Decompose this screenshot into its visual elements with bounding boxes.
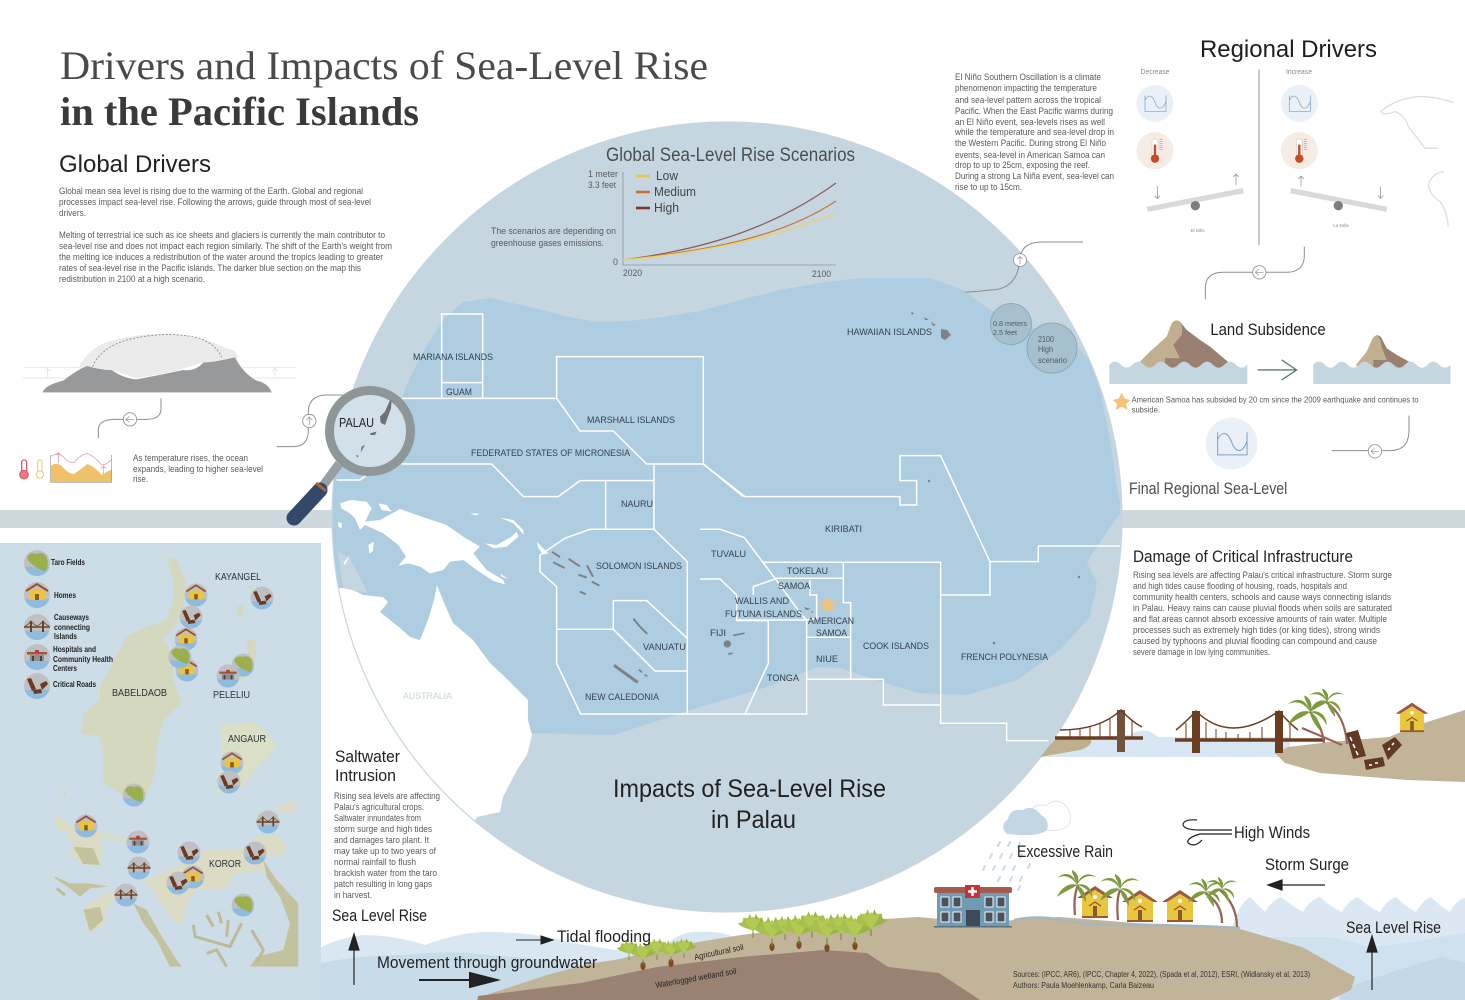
text block: global drivers: redistribution in 2100 at a high scenario.: [59, 274, 205, 284]
title: in the Pacific Islands: [60, 89, 419, 134]
title: [60, 43, 708, 134]
arrow: tidal flooding: [516, 936, 553, 944]
callout: 2100 High scenario bubble: scenario: [1038, 356, 1068, 365]
icon: star American Samoa on map: [819, 596, 837, 613]
heading: Saltwater Intrusion: Intrusion: [335, 766, 396, 785]
arrow: sea level rise left: [349, 934, 359, 985]
arrow: from scenarios chart to regional drivers: [965, 242, 1083, 292]
panel: ice sheet melting: [23, 334, 296, 392]
label: Movement through groundwater: Movement through groundwater: [377, 953, 597, 972]
seesaw: El Niño: [1147, 174, 1243, 233]
text block: ENSO: and sea-level pattern across the tropical: [955, 95, 1101, 105]
text block: ENSO: Pacific. When the East Pacific warms during: [955, 106, 1113, 116]
text: ocean expansion: [133, 453, 263, 484]
label: Federated States of Micronesia: FEDERATED STATES OF MICRONESIA: [471, 447, 631, 458]
darker blue redistribution area: [300, 278, 1120, 735]
palm crowns: [1288, 688, 1344, 731]
grey runoff line: [1014, 918, 1240, 928]
brown soil: [478, 950, 980, 1000]
legend: [636, 169, 696, 215]
label: Tokelau: TOKELAU: [787, 565, 828, 576]
circle outline: [332, 122, 1122, 912]
text block: global drivers: the melting ice induces a redistribution of the water around the tropics leading to greater: [59, 252, 383, 262]
heading: Regional Drivers: Regional Drivers: [1200, 36, 1377, 63]
icon: temperature decrease: [1136, 132, 1173, 169]
legend labels: [51, 558, 113, 689]
legend labels: Islands: [54, 632, 77, 641]
callout: 0.8 meters bubble: 0.8 meters: [993, 319, 1027, 328]
heading: Saltwater Intrusion: Saltwater: [335, 747, 400, 766]
arrow: ice to thermal expansion: [98, 398, 161, 438]
label: High Winds: High Winds: [1234, 823, 1310, 842]
label: Tuvalu: TUVALU: [711, 548, 746, 559]
callout: 2100 High scenario bubble: High: [1038, 345, 1053, 354]
icon: sea level increase: [1281, 85, 1318, 122]
text block: ENSO: El Niño Southern Oscillation is a climate: [955, 72, 1101, 82]
palms trunks: [1074, 885, 1237, 927]
ice cap: [78, 334, 237, 378]
legend: [24, 550, 113, 700]
line: high: [623, 183, 836, 260]
text block: global drivers: rates of sea-level rise in the Pacific islands. The darker blue section on the map this: [59, 263, 362, 273]
label: Kiribati: KIRIBATI: [825, 523, 862, 534]
text block: global drivers: Melting of terrestrial ice such as ice sheets and glaciers is currently the main contributor to: [59, 230, 385, 240]
legend: Low: [656, 169, 679, 183]
islands in dark grey: [553, 552, 744, 682]
label: Sea Level Rise right: Sea Level Rise: [1346, 918, 1441, 937]
axis labels: 1 meter: [588, 169, 618, 179]
divider: [1257, 69, 1261, 245]
panel: central Pacific map circle: [300, 122, 1122, 912]
icon: rain cloud: [983, 801, 1071, 890]
legend labels: Homes: [54, 591, 76, 600]
water left mid: [321, 952, 620, 1000]
heading: Impacts of Sea-Level Rise in Palau: [613, 775, 886, 834]
panel: ENSO diagram: [1109, 69, 1454, 498]
water: [1040, 730, 1290, 757]
label: American: AMERICAN: [808, 615, 854, 626]
line: medium: [623, 201, 836, 260]
legend: hospitals: [24, 644, 50, 671]
horizontal band: [0, 510, 1465, 528]
text block: saltwater: normal rainfall to flush: [334, 857, 416, 867]
label: waterlogged wetland soil: Waterlogged wetland soil: [655, 966, 737, 990]
legend labels: Taro Fields: [51, 558, 85, 567]
text: ocean expansion: As temperature rises, the ocean: [133, 453, 248, 463]
label: Nauru: NAURU: [621, 498, 653, 509]
text block: ENSO: During a strong La Niña event, sea-level can: [955, 171, 1114, 181]
label: French Polynesia: FRENCH POLYNESIA: [961, 651, 1049, 662]
sources: Sources: (IPCC, AR6), (IPCC, Chapter 4, 2022), (Spada et al, 2012), ESRI, (Widlansky et al, 2013): [1013, 970, 1310, 979]
dashed flow: [93, 335, 222, 367]
icon: thermal expansion chart: [20, 453, 112, 482]
panel background: [0, 543, 321, 1000]
label: Solomon Islands: SOLOMON ISLANDS: [596, 560, 682, 571]
arrow: sea level rise right: [1367, 936, 1377, 990]
EEZ boundary lines east: [700, 456, 1120, 741]
text block: damage: severe damage in low lying communities.: [1133, 647, 1270, 657]
land: Australia: [339, 585, 532, 820]
Hawaii and east Pacific islands: [804, 312, 1080, 644]
heading: Saltwater Intrusion: [335, 747, 400, 785]
water right mid: [1268, 933, 1465, 1000]
chart axes: [623, 172, 836, 265]
label: Futuna Islands: FUTUNA ISLANDS: [725, 608, 802, 619]
legend: critical roads: [24, 673, 50, 700]
callout: 0.8 meters bubble: [990, 304, 1032, 344]
heading: Land Subsidence: Land Subsidence: [1210, 320, 1326, 339]
legend: High: [654, 201, 679, 215]
text block: saltwater: may take up to two years of: [334, 846, 437, 856]
text block: ENSO: rise to up to 15cm.: [955, 182, 1022, 192]
legend labels: Centers: [53, 664, 77, 673]
land: New Guinea and islands: [338, 500, 548, 584]
arrow: storm surge: [1268, 880, 1325, 890]
small sea level arrows: [45, 368, 278, 377]
island labels: [112, 572, 266, 870]
EEZ boundary lines west: [337, 314, 750, 714]
text block: damage: in Palau. Heavy rains can cause pluvial floods when soils are saturated: [1133, 603, 1392, 613]
text block: damage: processes such as extremely high tides (or king tides), strong winds: [1133, 625, 1381, 635]
text block: ENSO: events, sea-level in American Samoa can: [955, 150, 1105, 160]
text block: damage: and high tides cause flooding of housing, roads, hospitals and: [1133, 581, 1347, 591]
illustration: causeway bridges scene: [1040, 688, 1465, 782]
palm trunks: [1302, 702, 1347, 745]
icon: magnifying glass on Palau: PALAU: [339, 415, 374, 430]
text block: saltwater: Saltwater innundates from: [334, 813, 421, 823]
arrow: subsidence progress: [1258, 360, 1297, 380]
line: low: [623, 213, 836, 260]
text: ocean expansion: rise.: [133, 474, 148, 484]
sources: Authors: Paula Moehlenkamp, Carla Baizeau: [1013, 981, 1154, 990]
axis labels: 2100: [812, 269, 831, 279]
text block: damage: community health centers, schools and cause ways connecting islands: [1133, 592, 1392, 602]
legend labels: Causeways: [54, 613, 89, 622]
text block: ENSO: phenomenon impacting the temperature: [955, 83, 1097, 93]
text block: ENSO: drop to up to 25cm, exposing the reef.: [955, 160, 1090, 170]
label: Fiji: FIJI: [710, 627, 726, 638]
icon: star: [1113, 393, 1131, 410]
seesaw: La Niña: La Niña: [1333, 223, 1349, 228]
label: Niue: NIUE: [816, 653, 838, 664]
arrow: groundwater: [419, 973, 497, 987]
label: Storm Surge: Storm Surge: [1265, 855, 1349, 874]
text block: damage: caused by typhoons and pluvial flooding can compound and cause: [1133, 636, 1377, 646]
legend labels: Critical Roads: [53, 680, 96, 689]
sea level lines: [23, 367, 296, 378]
tan land: [477, 917, 1355, 1000]
chart note: [491, 226, 616, 248]
axis labels: 0: [613, 257, 618, 267]
text block: damage: Rising sea levels are affecting Palau's critical infrastructure. Storm surge: [1133, 570, 1392, 580]
broken road: [1346, 730, 1402, 770]
text block: saltwater: [334, 791, 440, 900]
legend: taro fields: [24, 550, 50, 577]
map labels: [403, 326, 1049, 702]
note: American Samoa: American Samoa has subsided by 20 cm since the 2009 earthquake and continues to: [1132, 394, 1419, 404]
legend: Medium: [654, 185, 696, 199]
text: ocean expansion: expands, leading to higher sea-level: [133, 464, 263, 474]
legend labels: connecting: [54, 623, 90, 632]
icon: wind: [1183, 820, 1232, 845]
legend labels: Community Health: [53, 655, 113, 664]
text block: global drivers: drivers.: [59, 208, 86, 218]
text block: damage: and flat areas cannot absorb excessive amounts of rain water. Multiple: [1133, 614, 1387, 624]
callout: 2100 High scenario bubble: 2100: [1038, 335, 1054, 344]
text block: ENSO: [954, 72, 1114, 192]
label: agricultural soil: Agricultural soil: [693, 942, 744, 962]
label: Tonga: TONGA: [767, 672, 800, 683]
text block: global drivers: sea-level rise and does not impact each region similarly. The shift of the Earth's weight from: [59, 241, 392, 251]
text block: global drivers: Global mean sea level is rising due to the warming of the Earth. Global and regional: [59, 186, 363, 196]
text block: saltwater: patch resulting in long gaps: [334, 879, 433, 889]
text block: saltwater: brackish water from the taro: [334, 868, 437, 878]
heading: Global Drivers: Global Drivers: [59, 151, 211, 178]
label: Wallis and: WALLIS AND: [735, 595, 789, 606]
chart note: The scenarios are depending on: [491, 226, 616, 236]
legend: causeways: [24, 614, 50, 641]
southern islands around Koror: [55, 800, 298, 967]
water left light: [321, 932, 745, 1000]
icon: final sea level: [1206, 418, 1258, 470]
hospital: [934, 885, 1012, 928]
bridge right: [1175, 711, 1325, 753]
ground: [43, 357, 272, 392]
text block: global drivers: [59, 186, 392, 284]
axis labels: 2020: [623, 268, 642, 278]
callout: 0.8 meters bubble: 2.5 feet: [993, 328, 1017, 337]
illustration: bottom landscape: [321, 801, 1465, 1000]
label: Cook Islands: COOK ISLANDS: [863, 640, 929, 651]
icon: small island after subsidence: [1313, 335, 1450, 384]
label: Guam: GUAM: [446, 386, 472, 397]
icon: large island before subsidence: [1109, 320, 1247, 384]
heading: Damage of Critical Infrastructure: Damage of Critical Infrastructure: [1133, 547, 1353, 566]
label: Excessive Rain: Excessive Rain: [1017, 842, 1113, 861]
label: Vanuatu: VANUATU: [643, 641, 686, 652]
axis labels: 3.3 feet: [588, 180, 617, 190]
legend labels: Hospitals and: [53, 645, 96, 654]
note: American Samoa: [1132, 394, 1419, 415]
right shore: [1275, 710, 1465, 782]
label: Hawaiian Islands: HAWAIIAN ISLANDS: [847, 326, 932, 337]
text block: saltwater: Rising sea levels are affecting: [334, 791, 440, 801]
text block: ENSO: while the temperature and sea-level drop in: [954, 127, 1114, 137]
land: grey fringe north of Australia: [338, 552, 368, 593]
label: Australia: AUSTRALIA: [403, 690, 453, 701]
island labels: KAYANGEL: [215, 572, 261, 583]
label: Tidal flooding: Tidal flooding: [557, 927, 651, 946]
label: Samoa second line: SAMOA: [816, 627, 848, 638]
text block: ENSO: an El Niño event, sea-levels rises as well: [955, 117, 1105, 127]
island labels: ANGAUR: [228, 734, 266, 745]
circle background: [332, 122, 1122, 912]
title: Drivers and Impacts of Sea-Level Rise: [60, 43, 708, 88]
label: Mariana Islands: MARIANA ISLANDS: [413, 351, 493, 362]
water right deep: [1340, 957, 1465, 1000]
island labels: KOROR: [209, 859, 241, 870]
faint coastline sketches: [1381, 97, 1454, 227]
text block: saltwater: storm surge and high tides: [334, 824, 433, 834]
bridge left: [1055, 710, 1143, 752]
house: [1395, 703, 1429, 732]
note: American Samoa: subside.: [1132, 405, 1160, 415]
arrow: ENSO to land subsidence: [1205, 247, 1304, 299]
icon: temperature increase: [1281, 132, 1318, 169]
callout: 2100 High scenario bubble: [1027, 323, 1077, 373]
text block: global drivers: processes impact sea-level rise. Following the arrows, guide through most of sea-level: [59, 197, 371, 207]
chart: Global Sea-Level Rise Scenarios: [491, 145, 855, 279]
island labels: BABELDAOB: [112, 688, 167, 699]
water right: [1232, 897, 1465, 1000]
heading: Final Regional Sea-Level: Final Regional Sea-Level: [1129, 479, 1287, 498]
label: Marshall Islands: MARSHALL ISLANDS: [587, 414, 675, 425]
text block: ENSO: the Western Pacific. During strong El Niño: [955, 138, 1106, 148]
text block: saltwater: Palau's agricultural crops.: [334, 802, 424, 812]
text block: damage: [1133, 570, 1392, 657]
island labels: PELELIU: [213, 690, 250, 701]
impact markers: [75, 584, 279, 917]
palm crowns: [1057, 870, 1237, 907]
arrow: expansion to Palau: [277, 395, 343, 447]
label: Sea Level Rise left: Sea Level Rise: [332, 906, 427, 925]
legend: homes: [24, 582, 50, 609]
arrow: to final sea level: [1332, 416, 1409, 458]
text block: saltwater: in harvest.: [334, 890, 372, 900]
label: Samoa: SAMOA: [778, 580, 811, 591]
heading: Impacts of Sea-Level Rise in Palau: in Palau: [711, 806, 796, 834]
northern islands: [58, 557, 278, 797]
houses: [1077, 886, 1198, 922]
seesaw: El Niño: El Niño: [1191, 228, 1205, 233]
taro plants: [616, 908, 889, 970]
text block: saltwater: and damages taro plant. It: [334, 835, 430, 845]
sources: [1013, 970, 1310, 990]
heading: Impacts of Sea-Level Rise in Palau: Impacts of Sea-Level Rise: [613, 775, 886, 803]
label: New Caledonia: NEW CALEDONIA: [585, 691, 660, 702]
axis labels: [588, 169, 831, 279]
chart note: greenhouse gases emissions.: [491, 238, 604, 248]
chart title: Global Sea-Level Rise Scenarios: [606, 145, 855, 166]
label: Increase: Increase: [1286, 69, 1312, 76]
panel: Palau map: [0, 543, 321, 1000]
left shore: [1040, 738, 1091, 757]
icon: sea level decrease: [1136, 85, 1173, 122]
icon: magnifying glass on Palau: [294, 390, 410, 518]
label: Decrease: Decrease: [1141, 69, 1169, 76]
seesaw: La Niña: [1291, 176, 1387, 228]
